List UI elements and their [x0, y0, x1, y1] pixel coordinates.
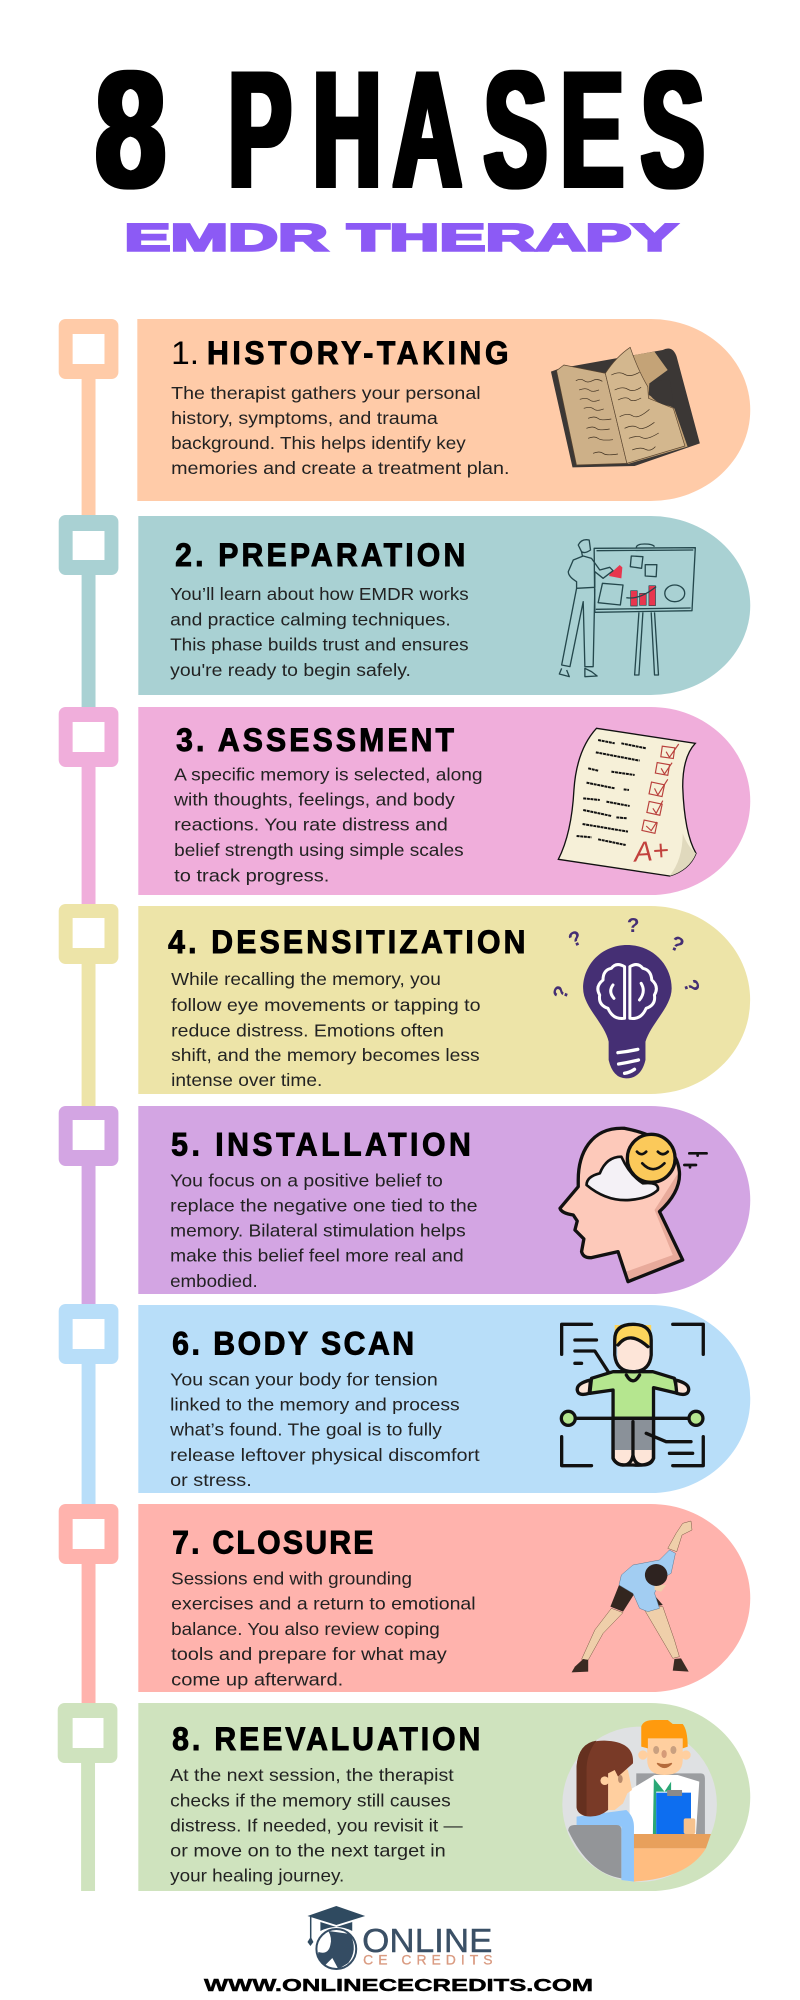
description 1	[171, 383, 509, 478]
heading 2: 2. PREPARATION	[175, 537, 465, 573]
logo tagline: CE CREDITS	[363, 1951, 493, 1968]
description 6	[169, 1369, 480, 1490]
description 5: make this belief feel more real and	[170, 1245, 464, 1266]
description 4: intense over time.	[171, 1070, 322, 1090]
description 8: or move on to the next target in	[170, 1840, 446, 1861]
description 1: The therapist gathers your personal	[171, 383, 481, 403]
description 7: come up afterward.	[171, 1669, 343, 1690]
description 4: follow eye movements or tapping to	[171, 995, 481, 1015]
website url: WWW.ONLINECECREDITS.COM	[204, 1975, 593, 1995]
description 8: At the next session, the therapist	[170, 1765, 454, 1785]
title: 8	[95, 38, 166, 222]
description 4: reduce distress. Emotions often	[171, 1020, 444, 1041]
icon: therapist and patient	[562, 1720, 717, 1882]
heading 4: 4. DESENSITIZATION	[168, 924, 525, 960]
description 6: You scan your body for tension	[170, 1369, 438, 1390]
icon: brain light bulb: ?	[678, 976, 704, 996]
description 2: You’ll learn about how EMDR works	[170, 584, 469, 604]
title: PHASES	[228, 37, 705, 222]
description 8: your healing journey.	[170, 1865, 344, 1886]
description 6: release leftover physical discomfort	[170, 1445, 480, 1465]
description 5: memory. Bilateral stimulation helps	[170, 1220, 466, 1241]
description 5	[170, 1170, 478, 1291]
card background 1	[137, 319, 750, 501]
description 6: what’s found. The goal is to fully	[169, 1419, 442, 1440]
icon: brain light bulb	[548, 914, 704, 1078]
timeline stem 4	[82, 954, 96, 1107]
panel: phase 8 reevaluation	[58, 1703, 750, 1891]
description 2: you're ready to begin safely.	[170, 660, 411, 680]
timeline marker 4	[59, 904, 118, 964]
description 6: or stress.	[170, 1470, 252, 1490]
description 7	[171, 1568, 476, 1690]
heading 6: 6. BODY SCAN	[172, 1326, 414, 1362]
logo	[307, 1906, 493, 1969]
card background 6	[138, 1305, 750, 1493]
icon: brain light bulb: ?	[666, 931, 687, 958]
description 1: memories and create a treatment plan.	[171, 458, 509, 478]
heading 1: 1.	[171, 335, 199, 371]
icon: open book	[551, 347, 700, 467]
icon: globe	[316, 1929, 356, 1969]
description 5: replace the negative one tied to the	[170, 1195, 478, 1216]
card background 2	[138, 516, 750, 695]
description 1: background. This helps identify key	[171, 433, 466, 453]
icon: brain light bulb: ?	[627, 914, 639, 937]
description 5: embodied.	[170, 1271, 258, 1291]
timeline marker 1	[59, 319, 118, 379]
logo wordmark: ONLINE	[362, 1922, 493, 1959]
heading 5: 5. INSTALLATION	[171, 1127, 471, 1163]
icon: person at whiteboard	[559, 540, 695, 677]
description 2: and practice calming techniques.	[170, 609, 451, 630]
description 7: exercises and a return to emotional	[171, 1593, 476, 1614]
icon: graduation cap	[307, 1906, 365, 1946]
subtitle: EMDR THERAPY	[124, 217, 678, 260]
panel: phase 6 body scan	[59, 1304, 750, 1505]
description 5: You focus on a positive belief to	[170, 1170, 443, 1191]
description 1: history, symptoms, and trauma	[171, 408, 438, 428]
panel: phase 3 assessment	[59, 707, 750, 907]
heading 3: 3. ASSESSMENT	[176, 722, 454, 758]
timeline stem 7	[82, 1555, 96, 1705]
timeline stem 3	[82, 757, 96, 907]
icon: brain light bulb: ?	[548, 983, 574, 1002]
card background 8	[138, 1703, 750, 1891]
heading 8: 8. REEVALUATION	[172, 1721, 480, 1757]
timeline stem 1	[82, 370, 96, 516]
heading 1: HISTORY-TAKING	[207, 335, 509, 371]
description 8	[170, 1765, 463, 1886]
icon: graded checklist	[558, 728, 696, 876]
panel: phase 2 preparation	[59, 515, 750, 710]
description 8: distress. If needed, you revisit it —	[170, 1815, 463, 1836]
description 3: with thoughts, feelings, and body	[173, 789, 455, 810]
timeline marker 5	[59, 1106, 118, 1166]
timeline marker 6	[59, 1304, 118, 1364]
panel: phase 1 history-taking	[59, 319, 750, 516]
panel: phase 7 closure	[59, 1504, 750, 1705]
timeline marker 8	[58, 1703, 117, 1763]
description 8: checks if the memory still causes	[170, 1790, 451, 1811]
heading 7: 7. CLOSURE	[172, 1525, 373, 1561]
description 4: While recalling the memory, you	[171, 969, 441, 989]
description 3: A specific memory is selected, along	[174, 764, 483, 785]
card background 7	[138, 1504, 750, 1692]
timeline stem 6	[82, 1354, 96, 1505]
timeline stem 8	[81, 1755, 95, 1891]
timeline marker 2	[59, 515, 118, 575]
description 3: belief strength using simple scales	[174, 840, 464, 860]
icon: head with smile and cloud	[560, 1128, 707, 1282]
icon: stretching person	[572, 1521, 692, 1672]
description 3: reactions. You rate distress and	[174, 814, 448, 835]
card background 3	[138, 707, 750, 895]
icon: graded checklist: A+	[631, 834, 670, 868]
timeline stem 5	[82, 1155, 96, 1306]
panel: phase 4 desensitization	[59, 904, 750, 1107]
description 6: linked to the memory and process	[170, 1394, 460, 1415]
card background 4	[138, 906, 750, 1094]
icon: brain light bulb: ?	[565, 926, 586, 952]
description 7: Sessions end with grounding	[171, 1568, 412, 1589]
description 2	[170, 584, 469, 680]
card background 5	[138, 1106, 750, 1294]
description 4	[171, 969, 481, 1090]
description 3	[173, 764, 483, 886]
icon: body scan figure	[561, 1324, 703, 1466]
timeline stem 2	[82, 565, 96, 710]
description 4: shift, and the memory becomes less	[171, 1045, 480, 1065]
description 2: This phase builds trust and ensures	[170, 634, 469, 655]
timeline marker 7	[59, 1504, 118, 1564]
timeline marker 3	[59, 707, 118, 767]
panel: phase 5 installation	[59, 1106, 750, 1306]
description 7: balance. You also review coping	[171, 1619, 440, 1639]
description 7: tools and prepare for what may	[171, 1644, 447, 1664]
description 3: to track progress.	[174, 865, 329, 886]
